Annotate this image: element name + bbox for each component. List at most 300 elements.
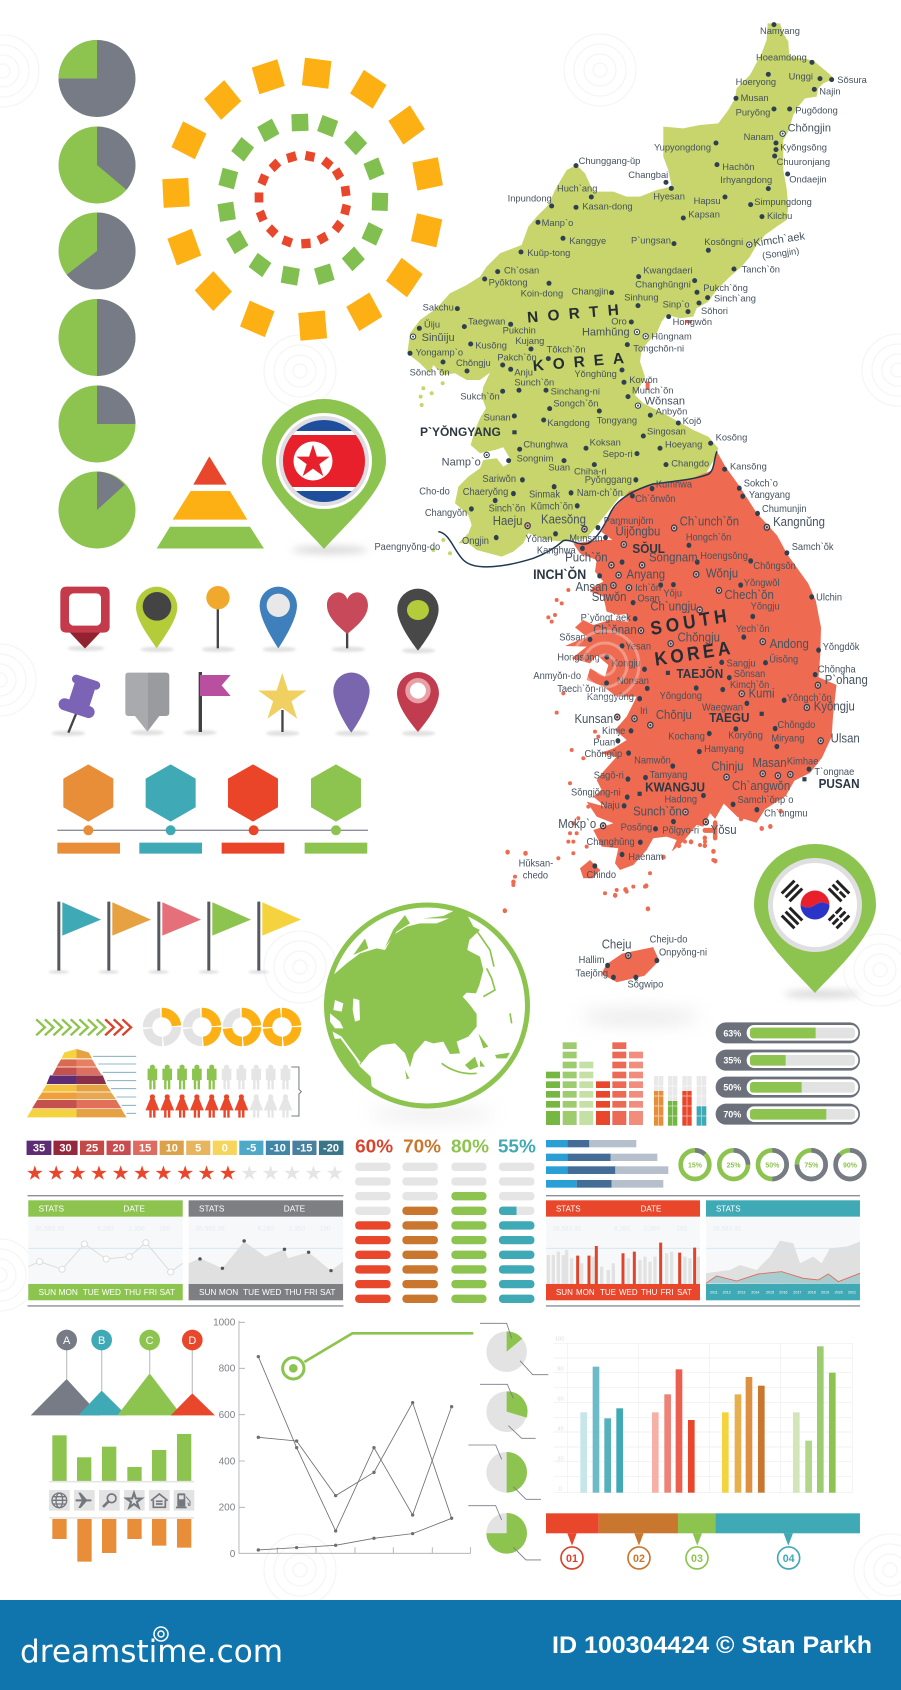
charts row: chevrons, donuts, stepped pyramid, people, stats bbox=[27, 1019, 536, 1306]
icon: star bbox=[126, 1493, 142, 1507]
stats panel: gray area chart: 8,260 bbox=[258, 1226, 274, 1233]
map labels: North Korea: Puryŏng bbox=[736, 107, 770, 117]
radial dashed rings bbox=[157, 58, 443, 549]
right charts group bbox=[546, 1022, 864, 1306]
map labels: South Korea: Hŭksan- bbox=[519, 858, 553, 870]
map labels: North Korea: Taegwan bbox=[468, 316, 505, 326]
icon: plane bbox=[75, 1493, 92, 1508]
stats panel: green line chart: 8,260 bbox=[97, 1226, 114, 1233]
map labels: South Korea: Ch`ŏnan bbox=[593, 622, 637, 637]
map labels: South Korea: Kanggyŏng bbox=[587, 691, 634, 703]
ring gauges bbox=[681, 1150, 864, 1179]
map labels: South Korea: Ich`ŏn bbox=[635, 583, 661, 594]
map labels: South Korea: Puan bbox=[593, 737, 615, 749]
outer orange ring bbox=[162, 58, 443, 341]
South Korea west coast and islands bbox=[513, 540, 730, 893]
map labels: South Korea: Yŏngdong bbox=[660, 691, 702, 702]
Japan and eastern islands bbox=[442, 928, 512, 1074]
stats panel: red bar chart: MON bbox=[576, 1288, 595, 1297]
map labels: North Korea: Sinp`o bbox=[663, 299, 690, 309]
footer image id: ID 100304424 © Stan Parkh bbox=[552, 1632, 872, 1659]
stats panel: green line chart: WED bbox=[102, 1288, 121, 1297]
segmented timeline bar: 04 bbox=[783, 1553, 795, 1565]
map labels: South Korea: Yŏnan bbox=[526, 533, 552, 545]
stats panel: green line chart: DATE bbox=[123, 1204, 145, 1213]
pin: dark with olive dot bbox=[397, 589, 439, 651]
temperature scale: 10 bbox=[166, 1143, 178, 1155]
map labels: South Korea: Chumunjin bbox=[762, 504, 807, 515]
map labels: North Korea: Koksan bbox=[590, 438, 621, 448]
map labels: South Korea: Kanghwa bbox=[537, 545, 576, 556]
map labels: North Korea: Sakchu bbox=[423, 303, 454, 313]
map labels: North Korea: Chŏngju bbox=[456, 358, 491, 368]
map labels: North Korea: Sepo-ri bbox=[603, 449, 633, 459]
map labels: South Korea: Yŏsu bbox=[711, 822, 737, 837]
map labels: South Korea: Sagŏ-ri bbox=[594, 770, 624, 782]
stats panel: red bar chart: TUE bbox=[600, 1288, 616, 1297]
temperature scale: -20 bbox=[323, 1143, 339, 1155]
map labels: South Korea: Ansan bbox=[576, 580, 608, 594]
map labels: North Korea: Musan bbox=[741, 93, 769, 103]
map labels: North Korea: Unggi bbox=[789, 72, 813, 82]
map labels: North Korea: Ch`osan bbox=[504, 265, 539, 275]
stats panel: teal area chart: 2016 bbox=[779, 1290, 787, 1294]
map labels: South Korea bbox=[374, 474, 868, 990]
stats panel: green line chart: 2,350 bbox=[128, 1226, 145, 1233]
North Korea land bbox=[407, 23, 834, 557]
map labels: South Korea: Masan bbox=[752, 756, 787, 770]
map labels: North Korea: Kangdong bbox=[547, 418, 590, 428]
map labels: North Korea: Suan bbox=[548, 463, 570, 473]
map labels: North Korea: Tongyang bbox=[597, 415, 637, 425]
map labels: North Korea: Anbyŏn bbox=[656, 407, 687, 417]
map labels: North Korea: Yupyongdong bbox=[654, 143, 711, 153]
pin: heart bbox=[327, 592, 368, 648]
Africa bbox=[334, 1038, 372, 1086]
temperature scale: 20 bbox=[112, 1143, 125, 1155]
map labels: South Korea: Kumi bbox=[749, 686, 775, 701]
map labels: North Korea: Pugŏdong bbox=[795, 105, 838, 115]
map labels: South Korea: P`ohang bbox=[825, 672, 868, 687]
map labels: South Korea: Ch`ungju bbox=[650, 599, 696, 613]
map labels: South Korea: Kyŏngju bbox=[814, 699, 855, 714]
map labels: North Korea: Kosŏng bbox=[716, 432, 747, 442]
percentage pill columns: 70% bbox=[403, 1136, 441, 1157]
map labels: South Korea: Taech`ŏn-ni bbox=[557, 684, 606, 695]
northern coast pieces bbox=[353, 938, 368, 955]
map labels: North Korea: Najin bbox=[819, 86, 841, 96]
map labels: South Korea: Mokp`o bbox=[558, 817, 596, 831]
map labels: South Korea: Chinju bbox=[711, 759, 744, 774]
map: land masses bbox=[407, 23, 837, 982]
stats panel: gray area chart: 35,583.35 bbox=[196, 1226, 225, 1233]
map labels: North Korea: Sinŭiju bbox=[422, 332, 455, 344]
temperature scale: -10 bbox=[270, 1143, 286, 1155]
city dots bbox=[410, 25, 832, 469]
map labels: North Korea: Yongamp`o bbox=[416, 348, 463, 358]
chevron arrows bbox=[36, 1019, 131, 1035]
temperature scale: 5 bbox=[195, 1143, 201, 1155]
percentage progress bars: 63% bbox=[723, 1028, 741, 1038]
temperature scale: 0 bbox=[222, 1143, 228, 1155]
map labels: South Korea: Chŏngsŏn bbox=[753, 561, 796, 572]
map labels: North Korea: Kujang bbox=[515, 336, 544, 346]
grouped column chart: 60 bbox=[557, 1397, 564, 1403]
map labels: North Korea: Changdo bbox=[671, 458, 709, 468]
map labels: South Korea: Kŭmch`ŏn bbox=[531, 501, 573, 513]
pin: blue bbox=[260, 587, 297, 648]
map labels: South Korea: Kimje bbox=[602, 726, 626, 737]
percentage progress bars: 70% bbox=[723, 1110, 741, 1120]
triangle flags bbox=[49, 902, 301, 973]
map labels: North Korea: Sukch`ŏn bbox=[460, 392, 500, 402]
map labels: South Korea: Yŏngju bbox=[751, 601, 780, 613]
map labels: South Korea: Andong bbox=[770, 636, 809, 651]
map labels: South Korea: Kimch`ŏn bbox=[730, 680, 769, 691]
map shadow bbox=[580, 1013, 700, 1021]
map labels: North Korea: Anju bbox=[514, 368, 533, 378]
map labels: North Korea: Songch`ŏn bbox=[553, 398, 598, 408]
map labels: South Korea: chedo bbox=[523, 870, 549, 882]
stats panel: green line chart bbox=[28, 1200, 183, 1300]
temperature scale: 25 bbox=[86, 1143, 98, 1155]
right charts group: 25% bbox=[727, 1162, 741, 1169]
map labels: South Korea: Pyŏnggang bbox=[585, 475, 632, 486]
map labels: South Korea: Cheju-do bbox=[650, 934, 688, 946]
map labels: North Korea: Koin-dong bbox=[521, 289, 563, 299]
map labels: North Korea: Kojŏ bbox=[683, 416, 701, 426]
pin: gray speech marker bbox=[125, 673, 169, 732]
map labels: North Korea: Oro bbox=[611, 317, 627, 327]
map labels: South Korea: Hoengsŏng bbox=[700, 551, 748, 562]
stats panel: red bar chart: DATE bbox=[641, 1204, 661, 1213]
percentage pill columns: 55% bbox=[498, 1136, 536, 1157]
map labels: South Korea: Hamyang bbox=[704, 743, 744, 755]
hexagon timeline bbox=[57, 764, 368, 854]
map labels: South Korea: Yŏngch`ŏn bbox=[787, 693, 832, 704]
pin: green with dark dot bbox=[136, 587, 177, 648]
pin: North Korea flag bbox=[262, 399, 386, 553]
map labels: South Korea: Ŭisŏng bbox=[769, 654, 798, 666]
map labels: South Korea: Yech`ŏn bbox=[736, 624, 770, 635]
map labels: North Korea: Pukch`ŏng bbox=[703, 283, 748, 293]
stats panel: teal area chart: 2017 bbox=[793, 1290, 801, 1294]
map labels: South Korea: KWANGJU bbox=[645, 780, 705, 794]
map labels: South Korea: TAEGU bbox=[709, 710, 749, 725]
stats panel: gray area chart: TUE bbox=[243, 1288, 260, 1297]
map labels: North Korea: (Songjin) bbox=[762, 246, 800, 261]
segmented timeline bar bbox=[546, 1513, 860, 1569]
stats panel: teal area chart bbox=[706, 1200, 860, 1300]
map labels: South Korea: Hallim bbox=[579, 955, 604, 966]
map labels: South Korea: Sŏsan bbox=[559, 632, 586, 644]
map labels: North Korea: Hoeryong bbox=[736, 77, 776, 87]
map labels: North Korea: Changbai bbox=[628, 170, 668, 180]
stats panel: red bar chart: STATS bbox=[556, 1204, 581, 1213]
map labels: South Korea: Waegwan bbox=[702, 702, 743, 714]
segmented orange donuts bbox=[147, 1012, 297, 1042]
grouped column chart bbox=[553, 1337, 852, 1493]
icon: globe bbox=[52, 1493, 67, 1508]
pie chart column bbox=[58, 40, 136, 548]
map labels: South Korea: Haeju bbox=[493, 513, 522, 528]
small segmented columns bbox=[654, 1076, 706, 1126]
stats panel: gray area chart: 180 bbox=[320, 1226, 331, 1233]
map labels: North Korea: Pyŏktong bbox=[489, 278, 528, 288]
middle green ring bbox=[217, 114, 388, 286]
grouped column chart: 40 bbox=[557, 1427, 564, 1433]
small pies with leader lines bbox=[468, 1323, 548, 1560]
map labels: South Korea: Cho-do bbox=[419, 486, 450, 497]
map labels: South Korea: Taejŏng bbox=[576, 968, 608, 980]
stats panel: teal area chart: 2015 bbox=[766, 1290, 774, 1294]
stats panel: teal area chart: 2012 bbox=[723, 1290, 731, 1294]
map labels: South Korea: Yangyang bbox=[749, 490, 790, 501]
stats panel: green line chart: MON bbox=[59, 1288, 78, 1297]
stats panel: green line chart: TUE bbox=[83, 1288, 100, 1297]
temperature scale: -5 bbox=[246, 1143, 256, 1155]
map labels: South Korea: Haenam bbox=[628, 852, 663, 863]
city dots bbox=[471, 480, 819, 977]
map labels: North Korea: Hachŏn bbox=[722, 162, 754, 172]
stats panel: green line chart: 35,583.35 bbox=[35, 1226, 65, 1233]
map labels: South Korea: Iri bbox=[640, 706, 648, 717]
pin: purple flag bbox=[199, 672, 231, 732]
map labels: North Korea: Hŭngnam bbox=[651, 332, 692, 342]
segmented timeline bar: 02 bbox=[633, 1553, 645, 1565]
pie 36% bbox=[58, 212, 136, 290]
map labels: South Korea: Wŏnju bbox=[706, 566, 738, 581]
map labels: North Korea: Namyang bbox=[760, 26, 800, 36]
map labels: South Korea: Kumhwa bbox=[656, 479, 693, 491]
stats panel: red bar chart: 2,350 bbox=[644, 1226, 660, 1233]
map labels: North Korea: Sŏsura bbox=[837, 75, 868, 85]
ABCD mountain chart: A bbox=[63, 1335, 71, 1347]
pin: red with white dot bbox=[397, 672, 439, 732]
map labels: North Korea: Chiha-ri bbox=[574, 467, 607, 477]
map labels: North Korea: Chŏngjin bbox=[788, 122, 831, 134]
map labels: North Korea: Sŏhori bbox=[701, 306, 728, 316]
map labels: South Korea: P`yŏngt`aek bbox=[581, 613, 631, 624]
map labels: South Korea: Osan bbox=[638, 593, 660, 605]
stats panel: gray area chart: THU bbox=[284, 1288, 302, 1297]
globe bbox=[320, 905, 528, 1117]
map labels: South Korea: Yesan bbox=[625, 641, 651, 653]
map labels: North Korea: Kapsan bbox=[688, 210, 720, 220]
map labels: South Korea: Kangnŭng bbox=[773, 515, 825, 529]
map labels: North Korea: Kasan-dong bbox=[582, 201, 633, 211]
map labels: South Korea: Yŏngdŏk bbox=[823, 642, 860, 653]
stepped pyramid bbox=[27, 1049, 136, 1117]
map labels: South Korea: Chŏnju bbox=[656, 707, 692, 722]
map labels: North Korea: Kyŏngsŏng bbox=[780, 143, 827, 153]
map labels: North Korea: Huch`ang bbox=[557, 184, 597, 194]
map labels: North Korea: Hongwŏn bbox=[673, 317, 712, 327]
stats panel: red bar chart: 180 bbox=[677, 1226, 688, 1233]
temperature scale bbox=[27, 1141, 343, 1155]
segmented timeline bar: 01 bbox=[566, 1553, 578, 1565]
map labels: South Korea: Ch`angwŏn bbox=[732, 778, 790, 793]
stats panel: green line chart: STATS bbox=[39, 1204, 65, 1213]
pin: yellow star bbox=[258, 673, 306, 732]
map labels: North Korea: Pukchin bbox=[503, 326, 536, 336]
line chart with three series: 200 bbox=[219, 1503, 236, 1514]
map labels: South Korea: Sariwŏn bbox=[482, 474, 516, 485]
grouped column chart: 0 bbox=[559, 1487, 562, 1493]
footer logo: dreamstime.com bbox=[20, 1634, 283, 1670]
map labels: North Korea: Ŭiju bbox=[424, 320, 440, 330]
inner red ring bbox=[255, 151, 351, 249]
icon: house bbox=[151, 1494, 168, 1507]
map labels: North Korea: Kusŏng bbox=[475, 341, 507, 351]
stats panel: red bar chart: WED bbox=[619, 1288, 638, 1297]
map labels: South Korea: Sinmak bbox=[529, 489, 560, 501]
icon: magnifier bbox=[103, 1494, 116, 1507]
percentage pill columns: 80% bbox=[451, 1136, 489, 1157]
stats panel: red bar chart: 35,583.35 bbox=[553, 1226, 581, 1233]
map labels: South Korea: Sangju bbox=[727, 658, 755, 670]
right charts group: 90% bbox=[843, 1162, 858, 1169]
stats panel: gray area chart: 2,350 bbox=[289, 1226, 305, 1233]
temperature scale: 35 bbox=[33, 1143, 45, 1155]
map labels: South Korea: Anmyŏn-do bbox=[533, 671, 582, 682]
map labels: South Korea: Koryŏng bbox=[728, 730, 763, 742]
Australia bbox=[470, 1092, 473, 1094]
stats panel: teal area chart: 2011 bbox=[710, 1290, 718, 1294]
map labels: North Korea: Inpundong bbox=[508, 193, 552, 203]
map labels: North Korea: KOREA bbox=[532, 349, 634, 375]
map labels: South Korea: Changyŏn bbox=[425, 507, 467, 519]
map labels: South Korea: Sunch`ŏn bbox=[633, 804, 682, 819]
map labels: North Korea: Changhŭngni bbox=[635, 279, 691, 289]
stats panel: green line chart: SAT bbox=[160, 1288, 175, 1297]
map labels: North Korea: Kilchu bbox=[767, 211, 792, 221]
map labels: North Korea: Kwangdaeri bbox=[643, 266, 693, 276]
map labels: South Korea: Sŏgwipo bbox=[628, 979, 664, 990]
map labels: North Korea: Tanch`ŏn bbox=[742, 264, 780, 274]
map labels: North Korea: Sunch`ŏn bbox=[514, 377, 554, 387]
percentage pill columns bbox=[355, 1136, 536, 1303]
map labels: North Korea: Kowŏn bbox=[629, 375, 658, 385]
map labels: North Korea: Hyesan bbox=[653, 191, 685, 201]
stats panel: green line chart: THU bbox=[124, 1288, 141, 1297]
ABCD mountain chart bbox=[31, 1330, 215, 1415]
map labels: South Korea: Kaesŏng bbox=[541, 512, 586, 527]
map labels: South Korea: Nonsan bbox=[617, 676, 649, 687]
map labels: South Korea: PUSAN bbox=[819, 777, 860, 791]
map labels: South Korea: Chŏngju bbox=[678, 630, 720, 645]
map labels: South Korea: Pŏlgyo-ri bbox=[662, 825, 699, 837]
map labels: South Korea: Chech`ŏn bbox=[724, 588, 774, 602]
line chart with three series: 600 bbox=[219, 1410, 236, 1421]
map labels: South Korea: KOREA bbox=[653, 637, 735, 670]
stats panel: teal area chart: 2018 bbox=[808, 1290, 816, 1294]
map labels: South Korea: Munsan bbox=[569, 533, 602, 545]
pin: purple drop bbox=[333, 672, 370, 733]
stats panel: red bar chart: FRI bbox=[661, 1288, 674, 1297]
pin: purple pushpin bbox=[57, 672, 104, 733]
map labels: North Korea: Chuuronjang bbox=[777, 157, 830, 167]
grouped column chart: 80 bbox=[557, 1367, 564, 1373]
stats panel: red bar chart: SAT bbox=[677, 1288, 692, 1297]
stats panel: gray area chart: DATE bbox=[284, 1204, 306, 1213]
line chart with three series: 400 bbox=[219, 1456, 236, 1467]
map labels: South Korea: Chŏngha bbox=[818, 664, 856, 675]
map labels: South Korea: Posŏng bbox=[621, 822, 652, 834]
stats panel: green line chart: SUN bbox=[39, 1288, 56, 1297]
map labels: South Korea: Sokch`o bbox=[744, 478, 778, 490]
map labels: North Korea: Chunggang-ŭp bbox=[579, 156, 640, 166]
ABCD mountain chart: C bbox=[146, 1335, 154, 1347]
pin: red square bbox=[60, 587, 110, 648]
map labels: North Korea: Ondaejin bbox=[789, 175, 827, 185]
map labels: South Korea: Kochang bbox=[668, 731, 705, 743]
map labels: South Korea: Miryang bbox=[771, 733, 804, 745]
stats panel: teal area chart: 35,583.35 bbox=[713, 1226, 741, 1233]
map labels: South Korea: Chŏngdo bbox=[778, 719, 816, 731]
segmented timeline bar: 03 bbox=[691, 1553, 703, 1565]
map labels: South Korea: Cheju bbox=[602, 937, 631, 952]
stats panel: gray area chart: MON bbox=[219, 1288, 238, 1297]
map labels: North Korea: Hoeamdong bbox=[756, 53, 807, 63]
map labels: South Korea: Sŏnsan bbox=[734, 668, 765, 680]
equalizer bars bbox=[546, 1042, 643, 1125]
stats panel: red bar chart bbox=[546, 1200, 700, 1300]
ABCD mountain chart: B bbox=[98, 1335, 105, 1347]
map labels: South Korea: Ŭijŏngbu bbox=[615, 523, 660, 539]
map labels: North Korea: Kimch`aek bbox=[753, 230, 806, 250]
map labels: South Korea: Sinch`ŏn bbox=[489, 503, 525, 515]
map labels: North Korea: Wŏnsan bbox=[645, 395, 685, 407]
map labels: South Korea: Sŏngjŏng-ni bbox=[571, 787, 621, 799]
map labels: South Korea: Paengnyŏng-do bbox=[374, 541, 441, 553]
map labels: South Korea: Hadong bbox=[664, 794, 697, 806]
stats panel: red bar chart: 8,260 bbox=[614, 1226, 630, 1233]
temperature scale: 30 bbox=[59, 1143, 72, 1155]
small three-tier pyramid bbox=[157, 456, 264, 549]
line chart with three series: 1000 bbox=[213, 1318, 236, 1329]
stats panel: gray area chart: FRI bbox=[304, 1288, 317, 1297]
stats panel: teal area chart: 2013 bbox=[737, 1290, 745, 1294]
map labels: North Korea bbox=[410, 25, 868, 477]
pin: orange ball bbox=[206, 586, 230, 648]
map labels: South Korea: Kongju bbox=[612, 658, 641, 670]
map labels: North Korea: Sŏnch`ŏn bbox=[410, 367, 450, 377]
stats panel: gray area chart: STATS bbox=[199, 1204, 225, 1213]
map pins and hexagon timeline and flags bbox=[49, 586, 439, 973]
stats panel: red bar chart: THU bbox=[641, 1288, 658, 1297]
map labels: North Korea: NORTH bbox=[527, 301, 629, 327]
percentage pill columns: 60% bbox=[355, 1136, 394, 1157]
percentage progress bars bbox=[716, 1022, 860, 1125]
map labels: South Korea: Yŏngwŏl bbox=[744, 578, 779, 589]
map labels: South Korea: Samch`ŏk bbox=[792, 542, 834, 553]
temperature scale: 15 bbox=[139, 1143, 151, 1155]
map labels: South Korea: Ulsan bbox=[831, 731, 860, 745]
map labels: North Korea: Sunan bbox=[484, 412, 511, 422]
map labels: South Korea: Kunsan bbox=[574, 711, 613, 726]
map labels: South Korea: TAEJŎN bbox=[677, 665, 723, 681]
map labels: South Korea: Chaeryŏng bbox=[463, 487, 508, 498]
stats panel: green line chart: FRI bbox=[144, 1288, 157, 1297]
stats panel: green line chart: 180 bbox=[159, 1226, 171, 1233]
map labels: South Korea: Panmunjŏm bbox=[604, 516, 653, 527]
inland seas bbox=[353, 998, 360, 1022]
map labels: North Korea: Munch`ŏn bbox=[632, 385, 673, 395]
map labels: South Korea: T`ongnae bbox=[814, 767, 855, 778]
pin: South Korea flag bbox=[754, 844, 876, 997]
map labels: South Korea: Hongch`ŏn bbox=[686, 532, 731, 543]
